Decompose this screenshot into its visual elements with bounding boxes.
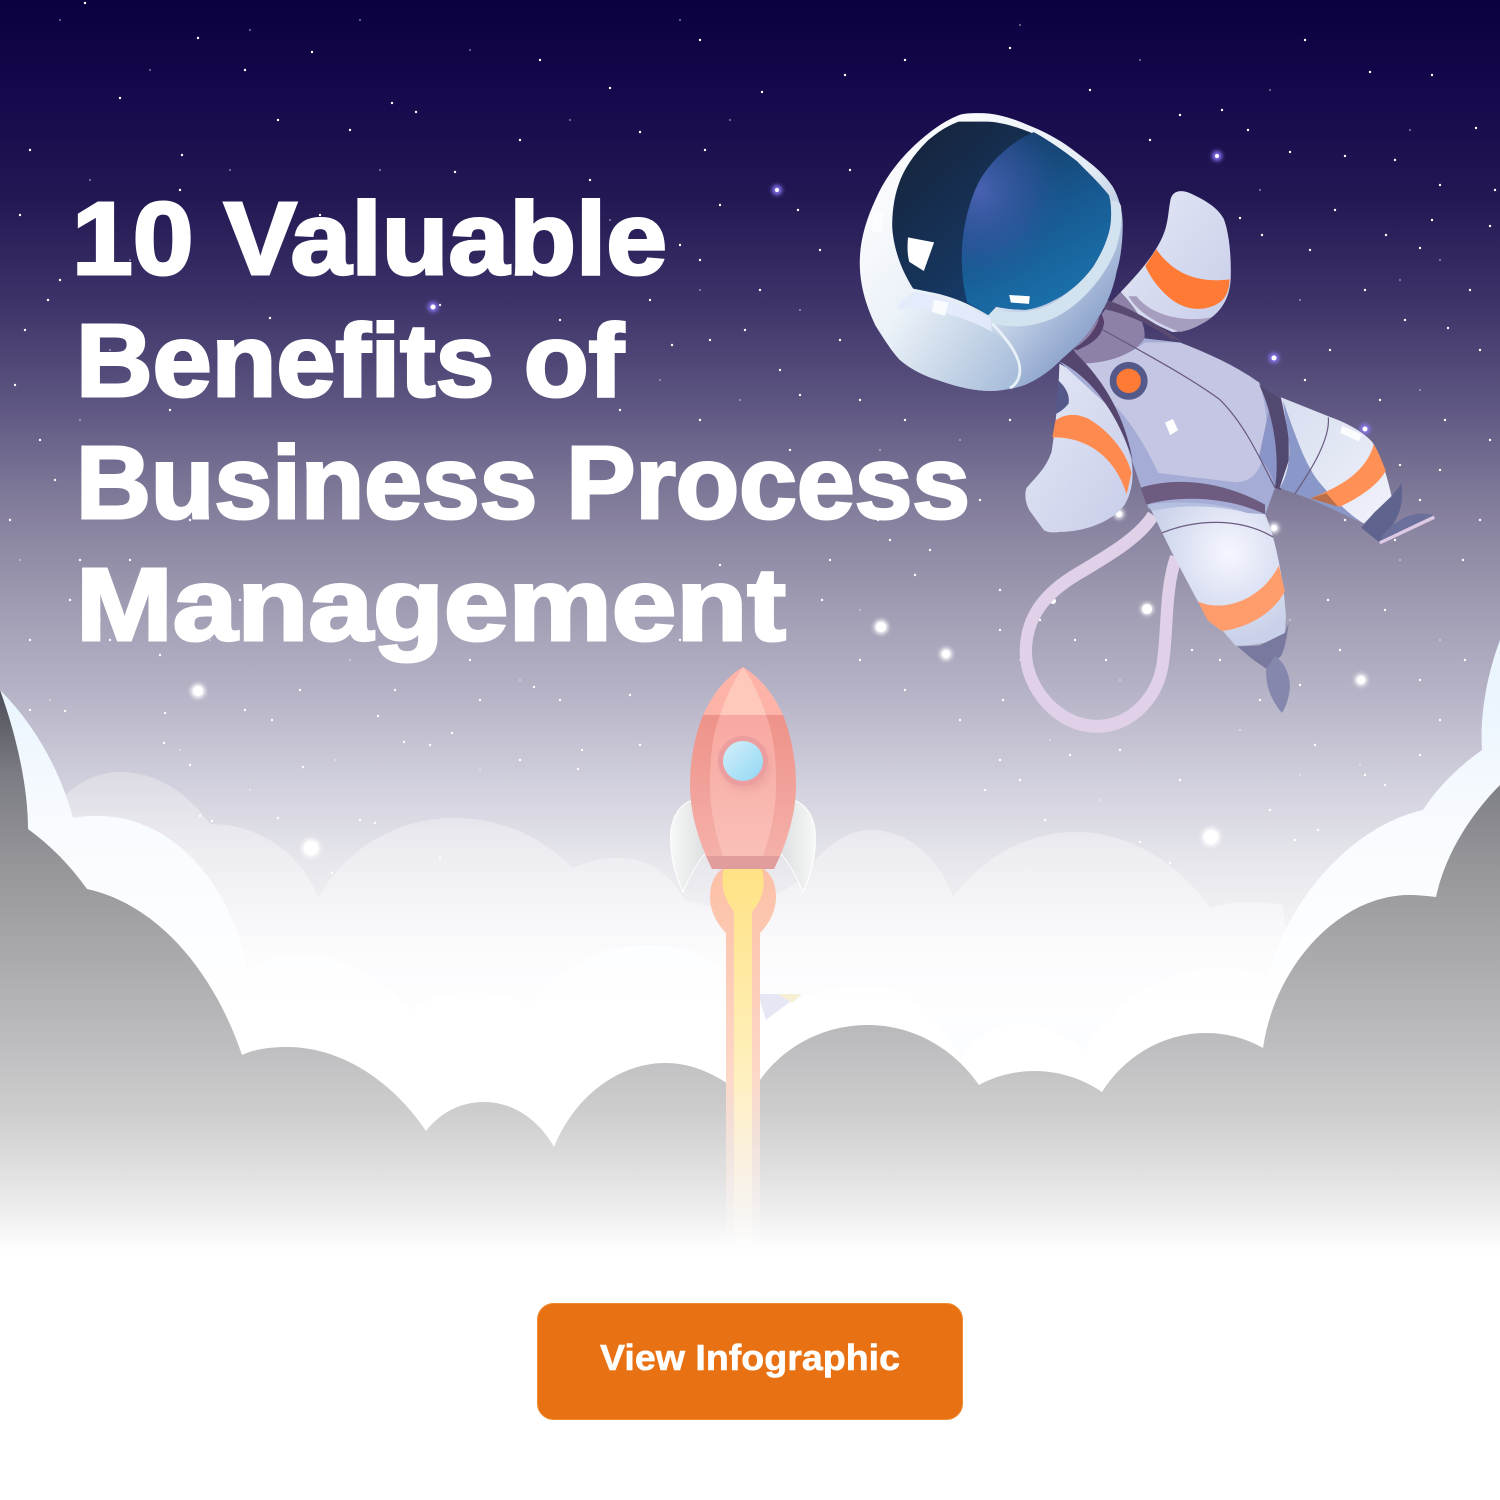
star field xyxy=(10,3,1495,920)
rocket window xyxy=(718,736,770,791)
rocket base band xyxy=(706,856,780,869)
rocket body centre panel xyxy=(710,715,776,869)
tether rope xyxy=(1026,515,1176,726)
flame trail inner xyxy=(722,869,764,1248)
rocket xyxy=(671,667,815,1248)
raised arm xyxy=(1121,191,1231,332)
torso xyxy=(1059,338,1289,515)
front arm xyxy=(1025,364,1133,532)
visor reflections xyxy=(908,237,934,271)
upper boot xyxy=(1361,484,1434,543)
lower leg xyxy=(1148,503,1286,646)
chest highlight xyxy=(1165,419,1178,435)
flame trail outer xyxy=(710,869,776,1248)
chest badge xyxy=(1110,362,1148,400)
title xyxy=(72,181,970,662)
extended leg xyxy=(1280,397,1392,524)
suit straps xyxy=(1059,300,1289,514)
rocket body xyxy=(690,715,796,869)
rocket fins xyxy=(671,800,815,892)
view infographic button xyxy=(538,1304,962,1420)
front white cloud xyxy=(0,640,1500,1260)
distant clouds xyxy=(60,772,1300,1060)
front grey cloud xyxy=(0,690,1500,1260)
background sliver behind cloud xyxy=(758,994,802,1020)
rocket nose highlight xyxy=(720,667,766,715)
title: 10 Valuable xyxy=(72,181,667,296)
helmet chin guard xyxy=(882,309,1020,391)
lower boot xyxy=(1237,622,1290,713)
rocket nose xyxy=(703,667,783,715)
view infographic button: View Infographic xyxy=(600,1337,900,1378)
astronaut xyxy=(860,113,1434,726)
title: Benefits of xyxy=(76,303,625,418)
neck shadow xyxy=(1073,292,1145,364)
title: Business Process xyxy=(76,425,970,540)
glowing stars xyxy=(191,151,1370,857)
title: Management xyxy=(76,547,786,662)
helmet xyxy=(860,113,1123,391)
